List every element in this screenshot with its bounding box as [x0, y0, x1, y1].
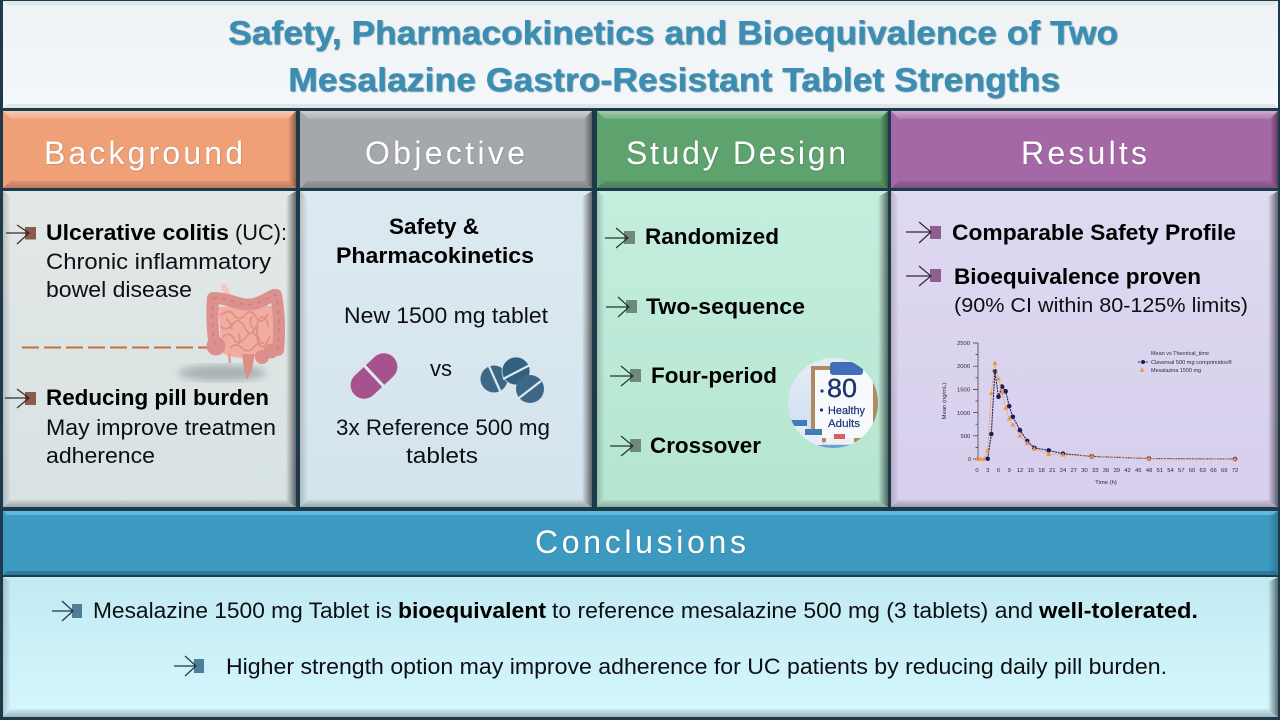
arrow bullet — [52, 601, 82, 621]
arrow bullet — [906, 222, 941, 243]
x axis labels: 3 — [986, 468, 990, 474]
arrow bullet — [174, 656, 204, 676]
panel: Results — [891, 191, 1278, 507]
y axis labels: 2000 — [957, 364, 971, 370]
series: Mesalazina 1500 mg — [974, 360, 1238, 461]
text: safety and pharmacokinetics — [336, 214, 534, 268]
x axis labels: 24 — [1060, 468, 1067, 474]
text: bioequivalence proven: Bioequivalence proven — [954, 264, 1201, 289]
chart: mean concentration vs time — [942, 341, 1238, 486]
text: crossover: Crossover — [650, 433, 761, 458]
chart legend: Mean vs Theorical_time — [1151, 351, 1210, 357]
header: Objective: Objective — [365, 135, 525, 171]
y axis labels: 500 — [960, 434, 971, 440]
header: Background — [3, 111, 296, 188]
header: Background: Background — [44, 135, 243, 171]
text: new tablet: New 1500 mg tablet — [344, 303, 548, 328]
header: Conclusions — [3, 511, 1278, 575]
x axis labels: 57 — [1178, 468, 1185, 474]
text: conclusion 2: Higher strength option may improve adherence for UC patients by reducing daily pill burden. — [226, 654, 1167, 679]
y axis title: Mean (ng/mL) — [942, 383, 948, 419]
text: reference tablets: tablets — [406, 443, 478, 468]
x axis labels: 33 — [1092, 468, 1099, 474]
x axis labels: 9 — [1008, 468, 1011, 474]
panel: Objective — [300, 191, 592, 507]
y axis labels: 1500 — [957, 388, 971, 394]
text: conclusion 1 — [93, 598, 1198, 623]
x axis labels: 21 — [1049, 468, 1056, 474]
text: bioequivalence proven — [954, 264, 1248, 317]
panel: Conclusions — [3, 577, 1278, 717]
header: Study Design: Study Design — [626, 135, 846, 171]
arrow bullet — [610, 436, 641, 456]
x axis labels: 48 — [1146, 468, 1153, 474]
x axis labels: 42 — [1124, 468, 1131, 474]
arrow bullet — [605, 228, 635, 248]
x axis labels: 39 — [1113, 468, 1120, 474]
text: reducing pill burden: Reducing pill burden — [46, 385, 269, 410]
x axis labels: 66 — [1210, 468, 1217, 474]
title panel — [3, 1, 1278, 108]
x axis labels: 45 — [1135, 468, 1142, 474]
chart legend — [1138, 351, 1233, 374]
series: Claversal 500 mg — [977, 369, 1237, 461]
x axis labels: 69 — [1221, 468, 1228, 474]
text: safety and pharmacokinetics: Safety & — [389, 214, 479, 239]
arrow bullet — [906, 266, 941, 286]
x axis labels: 15 — [1027, 468, 1035, 474]
text: conclusion 1: bioequivalent — [398, 598, 547, 623]
header: Conclusions: Conclusions — [535, 524, 746, 560]
text: conclusion 1: well-tolerated. — [1038, 598, 1198, 623]
icon: three blue tablets — [480, 357, 544, 403]
text: four-period: Four-period — [651, 363, 777, 388]
text: comparable safety profile: Comparable Safety Profile — [952, 220, 1236, 245]
arrow bullet — [606, 297, 637, 317]
x axis labels: 18 — [1038, 468, 1045, 474]
text: ulcerative colitis: Ulcerative colitis — [46, 220, 229, 245]
header: Study Design — [597, 111, 888, 188]
icon: clipboard 80 healthy adults: 80 — [827, 373, 857, 403]
x axis labels: 12 — [1017, 468, 1023, 474]
x axis labels: 54 — [1167, 468, 1174, 474]
text: ulcerative colitis — [46, 220, 287, 302]
text: reference tablets: 3x Reference 500 mg — [336, 415, 550, 440]
title text — [228, 14, 1118, 98]
icon: intestines — [178, 287, 279, 381]
x axis title: Time (h) — [1095, 480, 1117, 486]
x axis labels — [975, 468, 1238, 474]
x axis labels: 36 — [1103, 468, 1110, 474]
text: reducing pill burden: May improve treatmen — [46, 415, 276, 440]
y axis labels — [957, 341, 972, 463]
chart legend: Mesalazina 1500 mg — [1151, 368, 1201, 374]
y axis labels: 2500 — [957, 341, 971, 347]
header: Objective — [300, 111, 592, 188]
x axis labels: 60 — [1189, 468, 1196, 474]
text: conclusion 1: Mesalazine 1500 mg Tablet is — [93, 598, 392, 623]
text: ulcerative colitis: bowel disease — [46, 277, 192, 302]
text: ulcerative colitis: Chronic inflammatory — [46, 249, 271, 274]
header: Results — [891, 111, 1278, 188]
arrow bullet — [5, 389, 36, 408]
x axis labels: 0 — [975, 468, 979, 474]
arrow bullet — [6, 225, 36, 244]
text: bioequivalence proven: (90% CI within 80-125% limits) — [954, 295, 1248, 317]
text: vs: vs — [430, 356, 452, 381]
header: Results: Results — [1021, 135, 1147, 171]
icon: purple capsule — [345, 347, 403, 405]
chart legend: Claversal 500 mg comprimidos® — [1151, 359, 1233, 366]
x axis labels: 63 — [1199, 468, 1207, 474]
panel: Study Design — [597, 191, 888, 507]
x axis labels: 51 — [1156, 468, 1163, 474]
y axis labels: 1000 — [957, 411, 971, 417]
text: conclusion 1: to reference mesalazine 500 mg (3 tablets) and — [552, 598, 1033, 623]
panel: Background — [3, 191, 296, 507]
icon: clipboard 80 healthy adults: Adults — [828, 418, 861, 430]
title text: Safety, Pharmacokinetics and Bioequivalence of Two — [228, 14, 1118, 51]
x axis labels: 27 — [1070, 468, 1077, 474]
x axis labels: 72 — [1232, 468, 1238, 474]
text: two-sequence: Two-sequence — [646, 294, 805, 319]
icon: clipboard 80 healthy adults: Healthy — [828, 405, 865, 417]
arrow bullet — [610, 366, 641, 386]
text: safety and pharmacokinetics: Pharmacokinetics — [336, 243, 534, 268]
text: reducing pill burden — [46, 385, 276, 468]
x axis labels: 6 — [997, 468, 1001, 474]
title text: Mesalazine Gastro-Resistant Tablet Strengths — [288, 61, 1060, 98]
text: ulcerative colitis: (UC): — [235, 220, 287, 245]
y axis labels: 0 — [968, 457, 972, 463]
text: randomized: Randomized — [645, 224, 779, 249]
text: reference tablets — [336, 415, 550, 468]
text: reducing pill burden: adherence — [46, 443, 155, 468]
icon: clipboard 80 healthy adults — [788, 358, 880, 454]
x axis labels: 30 — [1081, 468, 1088, 474]
